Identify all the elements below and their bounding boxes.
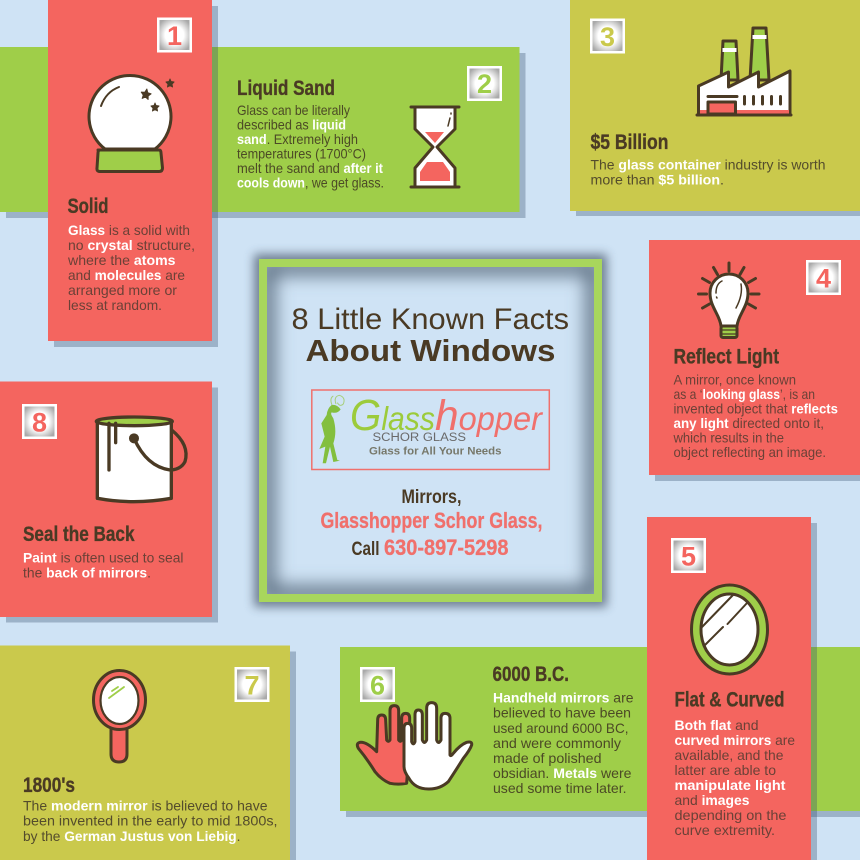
- text: reflect light body: which results in the: [673, 430, 784, 446]
- panel 8: seal the back: [0, 382, 218, 622]
- badge 1: 1: [167, 21, 182, 51]
- text: five billion body: more than $5 billion.: [590, 172, 724, 188]
- heading: solid: Solid: [68, 194, 108, 218]
- text: solid body: where the atoms: [67, 252, 176, 268]
- icon: crystal ball: [89, 76, 174, 172]
- text: reflect light body: any light directed onto it,: [674, 415, 824, 431]
- panel 1: solid: [48, 0, 218, 347]
- icon: light bulb: [698, 263, 759, 338]
- icon: hourglass: [411, 107, 459, 187]
- text: seal the back body: Paint is often used to seal: [23, 550, 184, 566]
- panel 6: 6000 B.C.: [340, 647, 860, 817]
- text: liquid sand body: Glass can be literally: [237, 102, 350, 118]
- text: flat and curved body: manipulate light: [674, 777, 786, 793]
- call to action: Mirrors,: [402, 486, 462, 508]
- text: solid body: and molecules are: [68, 267, 185, 283]
- text: flat and curved body: available, and the: [674, 747, 784, 763]
- text: 6000 B.C. body: and were commonly: [493, 735, 621, 751]
- title: [292, 303, 569, 368]
- text: liquid sand body: described as liquid: [237, 116, 346, 132]
- text: 6000 B.C. body: believed to have been: [493, 704, 631, 720]
- text: flat and curved body: latter are able to: [674, 762, 776, 778]
- text: 1800's body: [23, 798, 278, 844]
- logo wordmark: [350, 391, 544, 458]
- icon: oval mirror: [692, 585, 768, 674]
- badge 2: 2: [477, 69, 492, 99]
- badge 6: [360, 667, 395, 702]
- text: 6000 B.C. body: Handheld mirrors are: [493, 690, 634, 706]
- heading: reflect light: Reflect Light: [674, 344, 779, 368]
- text: liquid sand body: melt the sand and after it: [237, 160, 383, 176]
- text: 6000 B.C. body: used some time later.: [493, 780, 626, 796]
- logo wordmark: Glass: [350, 391, 435, 440]
- text: flat and curved body: curved mirrors are: [674, 732, 795, 748]
- icon: hand mirror: [94, 670, 146, 762]
- badge 7: [234, 667, 270, 702]
- panel 2: liquid sand: [0, 47, 526, 218]
- badge 8: 8: [32, 408, 47, 438]
- text: solid body: no crystal structure,: [68, 237, 195, 253]
- title: 8 Little Known Facts: [292, 303, 569, 336]
- call to action: Call: [352, 538, 380, 560]
- text: 1800's body: The modern mirror is believed to have: [23, 798, 268, 814]
- badge 7: 7: [244, 670, 260, 700]
- text: five billion body: The glass container industry is worth: [590, 156, 826, 172]
- heading: flat and curved: Flat & Curved: [674, 688, 784, 712]
- logo wordmark: SCHOR GLASS: [372, 432, 466, 444]
- text: reflect light body: as a ‘looking glass’, is an: [674, 386, 815, 402]
- heading: 6000 B.C.: 6000 B.C.: [492, 662, 569, 686]
- text: seal the back body: [23, 550, 184, 580]
- text: flat and curved body: depending on the: [674, 807, 787, 823]
- logo wordmark: hopper: [435, 392, 544, 440]
- icon: hands: [357, 703, 472, 789]
- call to action: 630-897-5298: [384, 535, 508, 560]
- text: reflect light body: object reflecting an image.: [674, 444, 826, 460]
- badge 3: [590, 18, 625, 54]
- badge 4: [806, 260, 841, 295]
- panel 5: flat and curved: [647, 517, 817, 860]
- text: 1800's body: been invented in the early to mid 1800s,: [23, 812, 278, 828]
- panel 4: reflect light: [649, 240, 860, 481]
- badge 4: 4: [816, 264, 831, 294]
- badge 5: 5: [681, 542, 696, 572]
- panel 7: 1800's: [0, 646, 296, 860]
- text: flat and curved body: and images: [674, 792, 750, 808]
- text: liquid sand body: [237, 102, 384, 190]
- logo: glasshopper schor glass: [312, 390, 549, 470]
- call to action: Glasshopper Schor Glass,: [320, 508, 542, 533]
- text: 6000 B.C. body: obsidian. Metals were: [493, 765, 632, 781]
- heading: 1800's: 1800's: [23, 773, 75, 797]
- title: About Windows: [306, 333, 556, 368]
- text: reflect light body: A mirror, once known: [674, 372, 796, 388]
- badge 8: [22, 404, 57, 439]
- text: five billion body: [590, 156, 826, 188]
- logo wordmark: Glass for All Your Needs: [369, 446, 502, 458]
- badge 2: [467, 66, 502, 101]
- heading: five billion: $5 Billion: [590, 130, 668, 154]
- text: reflect light body: [673, 372, 838, 460]
- text: 6000 B.C. body: [493, 690, 634, 796]
- logo grasshopper figure: [319, 395, 344, 463]
- text: flat and curved body: [674, 717, 795, 838]
- icon: factory: [697, 28, 791, 115]
- text: 6000 B.C. body: used around 6000 BC,: [493, 720, 628, 736]
- badge 5: [671, 538, 706, 573]
- text: 1800's body: by the German Justus von Liebig.: [23, 828, 240, 844]
- call to action: [320, 486, 542, 560]
- text: reflect light body: invented object that reflects: [674, 400, 838, 416]
- text: solid body: Glass is a solid with: [68, 222, 190, 238]
- text: solid body: arranged more or: [68, 282, 177, 298]
- text: 6000 B.C. body: made of polished: [493, 750, 602, 766]
- text: liquid sand body: temperatures (1700°C): [237, 146, 366, 162]
- heading: seal the back: Seal the Back: [23, 522, 135, 546]
- heading: liquid sand: Liquid Sand: [237, 76, 335, 100]
- text: solid body: [67, 222, 195, 313]
- badge 1: [157, 18, 192, 52]
- text: liquid sand body: cools down, we get glass.: [237, 174, 384, 190]
- text: flat and curved body: Both flat and: [674, 717, 758, 733]
- badge 6: 6: [370, 670, 385, 700]
- central title frame: [254, 254, 607, 607]
- badge 3: 3: [600, 22, 615, 52]
- text: solid body: less at random.: [68, 297, 162, 313]
- text: seal the back body: the back of mirrors.: [23, 564, 151, 580]
- text: liquid sand body: sand. Extremely high: [237, 131, 358, 147]
- icon: paint bucket: [96, 417, 186, 502]
- panel 3: five billion: [570, 0, 860, 216]
- text: flat and curved body: curve extremity.: [674, 822, 775, 838]
